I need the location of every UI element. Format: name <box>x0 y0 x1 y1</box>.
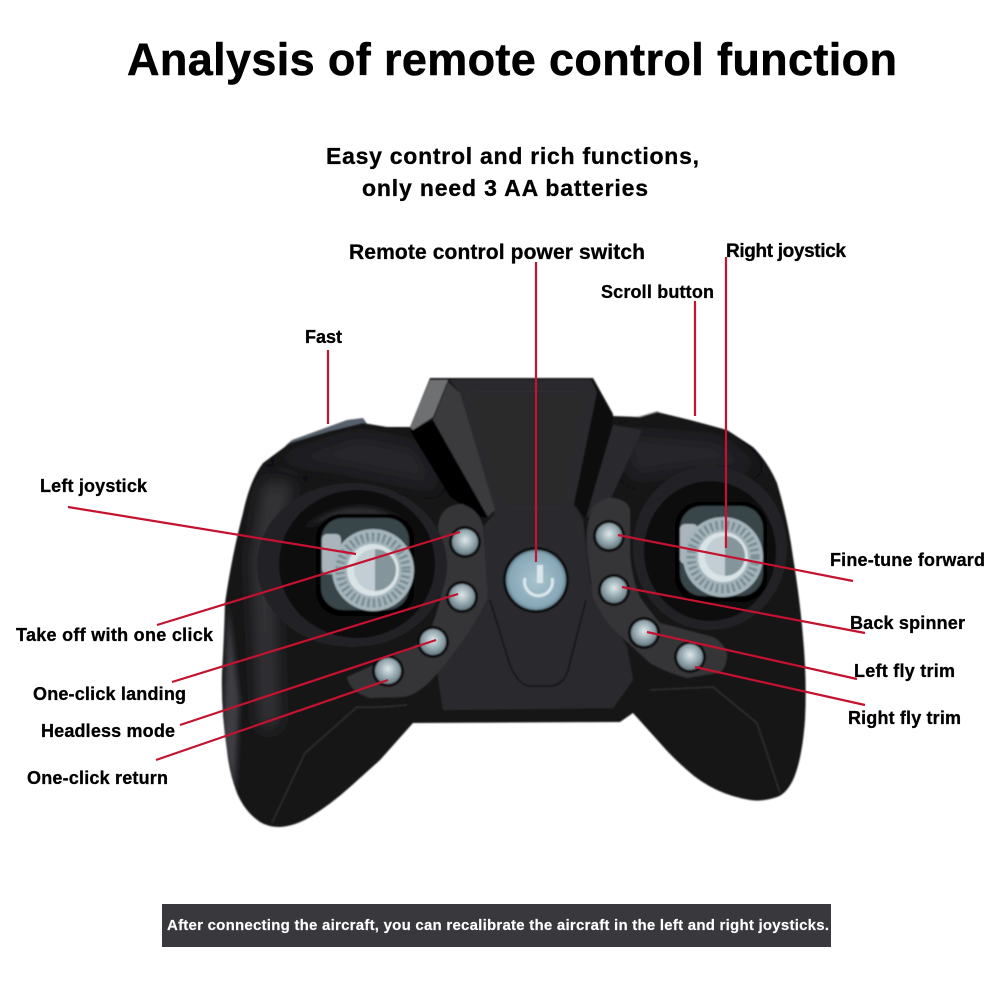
title: Analysis of remote control function <box>127 34 897 85</box>
label: left fly trim: Left fly trim <box>854 661 955 681</box>
label: one-click return: One-click return <box>27 768 168 788</box>
right button arc <box>587 498 727 678</box>
right shoulder button: scroll <box>622 411 672 428</box>
body highlights <box>222 430 760 800</box>
left grip seam <box>272 705 407 823</box>
label: remote control power switch: Remote control power switch <box>349 241 645 264</box>
left joystick <box>257 483 447 647</box>
subtitle <box>326 143 699 201</box>
label: fast: Fast <box>305 327 342 347</box>
right function buttons <box>593 520 706 673</box>
right grip seam <box>650 687 780 793</box>
right joystick <box>633 466 787 630</box>
label: one-click landing: One-click landing <box>33 684 186 704</box>
centre panel <box>437 380 633 710</box>
centre panel darker band <box>470 395 582 505</box>
label: headless mode: Headless mode <box>41 721 175 741</box>
label: left joystick: Left joystick <box>40 476 148 496</box>
subtitle: only need 3 AA batteries <box>362 175 648 201</box>
remote controller illustration <box>222 378 806 827</box>
label: take off with one click: Take off with one click <box>16 625 214 645</box>
label: right joystick: Right joystick <box>726 241 846 262</box>
right black wedge <box>574 378 613 518</box>
label: back spinner: Back spinner <box>850 613 965 633</box>
right lit facet <box>586 425 642 518</box>
left lit facet <box>433 382 495 517</box>
subtitle: Easy control and rich functions, <box>326 143 699 169</box>
footer note bar: After connecting the aircraft, you can recalibrate the aircraft in the left and right joysticks. <box>167 917 829 934</box>
left silver trim <box>410 380 448 430</box>
left button arc <box>347 504 488 698</box>
label: fine-tune forward: Fine-tune forward <box>830 550 985 570</box>
left function buttons <box>372 526 481 687</box>
footer note bar <box>162 904 831 947</box>
label: right fly trim: Right fly trim <box>848 708 961 728</box>
lower centre slot outline <box>490 600 586 686</box>
controller body <box>222 378 806 827</box>
red leader lines <box>68 257 865 760</box>
power button <box>503 547 569 613</box>
left shoulder button: fast <box>285 418 368 452</box>
label: scroll button: Scroll button <box>601 282 714 302</box>
left black wedge <box>410 420 488 518</box>
